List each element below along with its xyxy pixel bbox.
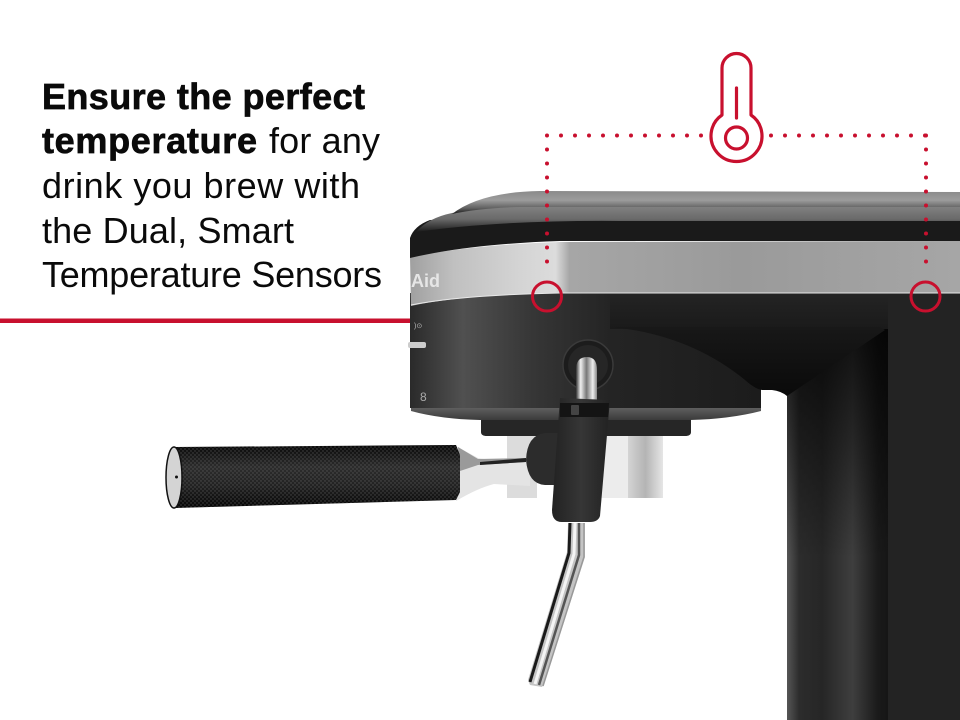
band highlight (411, 293, 960, 305)
espresso machine (166, 191, 960, 720)
lock icon: 8 (420, 390, 427, 404)
temperature callout (532, 54, 940, 311)
sensor marker left (532, 282, 562, 311)
steam wand (528, 523, 585, 687)
top lid (452, 191, 960, 214)
brand mark: Aid (411, 271, 440, 291)
tube collar (560, 403, 609, 417)
steam knob (563, 340, 613, 390)
column top shade (787, 328, 888, 558)
dark shoulder (612, 327, 885, 396)
control dial: )⊙ (414, 323, 422, 330)
body underside lip (411, 408, 761, 420)
portafilter handle (166, 445, 460, 508)
portafilter neck (456, 446, 530, 501)
headline text (42, 76, 382, 295)
top black band (410, 205, 960, 258)
headline text: Temperature Sensors (42, 254, 382, 295)
steam pipe (576, 357, 597, 401)
headline text: drink you brew with (42, 165, 360, 206)
icon: thermometer (711, 54, 762, 161)
upper cross band (610, 293, 888, 329)
red rule (0, 318, 410, 323)
sensor marker right (911, 282, 940, 311)
control dial (408, 323, 426, 348)
dotted bracket (547, 136, 926, 272)
group head (507, 434, 663, 498)
silver band (410, 241, 960, 306)
upper lid layer (416, 206, 960, 232)
machine back (886, 293, 960, 720)
steam wand tube (552, 398, 610, 522)
machine column (787, 328, 888, 720)
headline text: temperature (42, 120, 257, 161)
headline text: the Dual, Smart (42, 210, 294, 251)
base plate (481, 417, 691, 436)
steam arm pivot (526, 433, 566, 485)
headline text: Ensure the perfect (42, 76, 365, 117)
lower body (410, 293, 761, 408)
headline text: for any (269, 120, 380, 161)
